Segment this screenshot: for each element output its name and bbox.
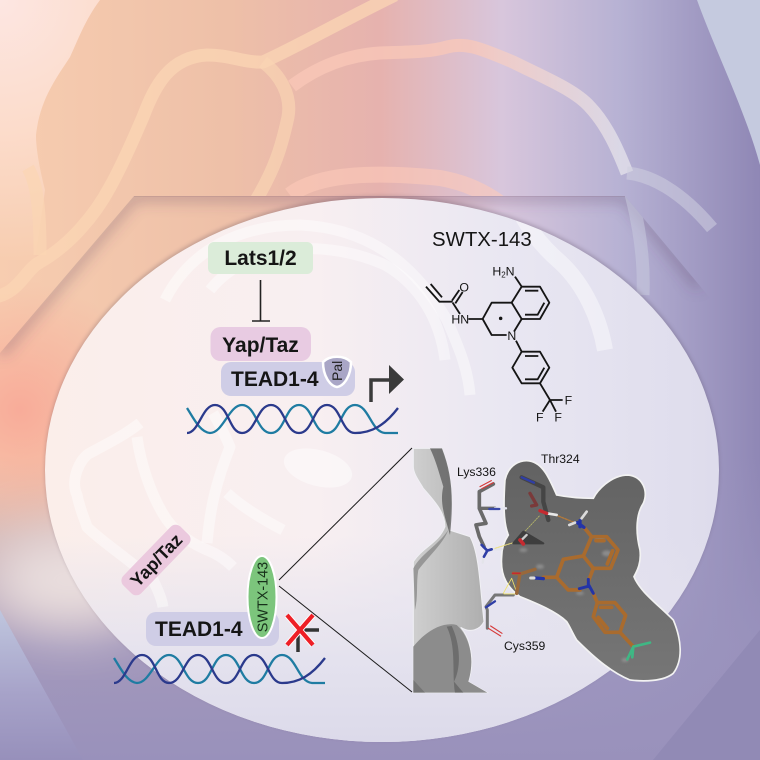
chemical structure: F xyxy=(536,410,544,424)
node: TEAD1-4 top: TEAD1-4 xyxy=(231,368,319,391)
bottom corners xyxy=(0,610,760,760)
protein surface: left xyxy=(413,448,487,693)
chemical structure: H xyxy=(492,265,501,279)
chemical structure: F xyxy=(554,410,562,424)
chemical structure: F xyxy=(565,393,573,407)
Pal pocket: Pal xyxy=(329,361,345,381)
hexagon panel shading xyxy=(0,173,700,353)
node: Yap/Taz top: Yap/Taz xyxy=(222,334,299,357)
DNA top xyxy=(187,405,398,433)
node: TEAD1-4 top xyxy=(221,362,355,396)
node: Yap/Taz displaced: Yap/Taz xyxy=(126,530,186,591)
chemical structure: O xyxy=(459,280,469,294)
node: Yap/Taz top xyxy=(210,327,311,361)
surface highlights xyxy=(519,537,628,662)
node: Lats1/2: Lats1/2 xyxy=(224,247,297,270)
chemical structure: N xyxy=(506,265,515,279)
node: Lats1/2 xyxy=(208,242,313,274)
transcription arrow xyxy=(371,365,404,402)
node: TEAD1-4 bottom: TEAD1-4 xyxy=(155,618,243,641)
Pal pocket xyxy=(323,357,351,387)
ligand heteroatoms xyxy=(531,512,650,659)
zoom lines xyxy=(279,448,412,692)
node: TEAD1-4 bottom xyxy=(146,612,279,646)
ligand surface xyxy=(501,461,680,681)
SWTX-143 inhibitor xyxy=(248,556,276,638)
chemical structure: 2 xyxy=(501,271,506,280)
chemical structure: HN xyxy=(451,312,469,326)
residue labels: Lys336 xyxy=(457,465,496,479)
compound title: SWTX-143 xyxy=(432,229,532,251)
SWTX-143 inhibitor: SWTX-143 xyxy=(256,562,272,632)
chemical structure xyxy=(426,265,573,424)
blocked transcription xyxy=(287,615,319,652)
protein binding pocket detail xyxy=(413,448,680,693)
residue labels: Cys359 xyxy=(504,639,546,653)
residue labels: Thr324 xyxy=(541,452,580,466)
inhibition line xyxy=(252,280,270,321)
node: Yap/Taz displaced xyxy=(119,522,193,598)
chemical structure: N xyxy=(507,329,516,343)
ghost vessels inside ellipse xyxy=(75,197,605,607)
DNA bottom xyxy=(114,655,325,683)
residue sticks xyxy=(476,477,575,636)
residue labels xyxy=(457,452,580,653)
vessels in background xyxy=(0,0,712,297)
ligand sticks xyxy=(543,527,633,647)
central ellipse xyxy=(45,196,719,742)
